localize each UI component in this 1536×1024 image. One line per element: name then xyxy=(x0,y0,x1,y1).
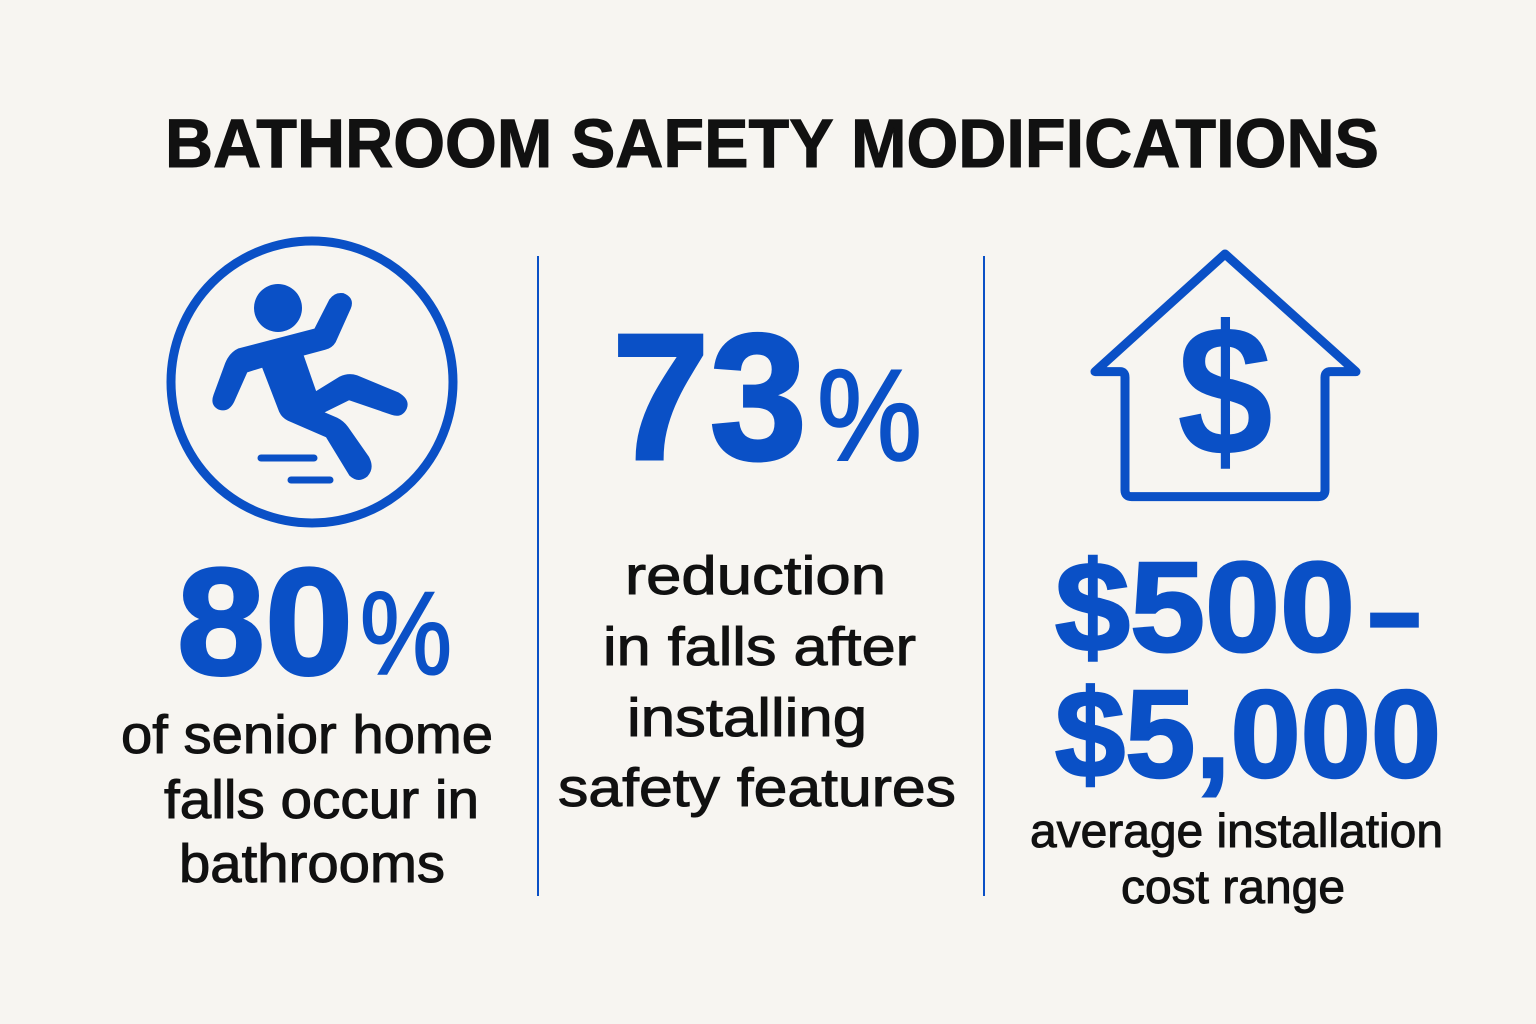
statistic: 80% xyxy=(177,537,452,707)
panel: reduction statistic xyxy=(558,297,956,818)
icon: house with dollar sign: $ xyxy=(1177,288,1273,495)
title: BATHROOM SAFETY MODIFICATIONS xyxy=(165,105,1379,182)
description: reduction xyxy=(558,546,956,818)
divider right xyxy=(983,256,985,896)
description: reduction: safety features xyxy=(558,758,956,818)
statistic: 73% xyxy=(612,297,922,498)
statistic: cost range xyxy=(1055,536,1441,804)
description: reduction: in falls after xyxy=(603,617,916,677)
icon: house with dollar sign xyxy=(1095,254,1356,497)
statistic: cost range: $500 xyxy=(1055,536,1355,679)
panel: falls statistic xyxy=(121,241,493,894)
statistic: 73%: % xyxy=(817,342,922,488)
statistic: cost range: – xyxy=(1368,537,1421,683)
description: cost: cost range xyxy=(1121,860,1345,913)
icon: person slipping in circle xyxy=(171,241,453,523)
description: cost: average installation xyxy=(1030,804,1443,857)
statistic: cost range: $5,000 xyxy=(1055,666,1441,804)
description: falls xyxy=(121,705,493,894)
statistic: 80%: 80 xyxy=(177,537,353,707)
divider left xyxy=(537,256,539,896)
description: reduction: reduction xyxy=(625,546,886,606)
description: falls: of senior home xyxy=(121,705,493,765)
description: falls: falls occur in xyxy=(164,770,479,830)
description: falls: bathrooms xyxy=(179,834,445,894)
statistic: 80%: % xyxy=(360,568,452,700)
panel: cost statistic xyxy=(1030,254,1443,913)
statistic: 73%: 73 xyxy=(612,297,807,498)
description: cost xyxy=(1030,804,1443,913)
description: reduction: installing xyxy=(627,688,867,748)
